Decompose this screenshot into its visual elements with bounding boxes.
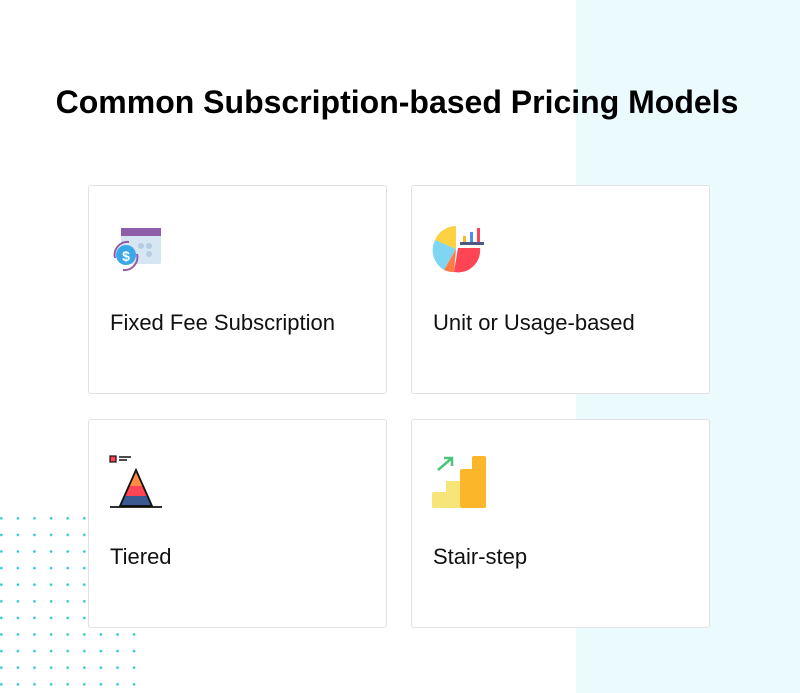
card: unit or usage bbox=[411, 185, 710, 394]
card: stair-step bbox=[411, 419, 710, 628]
icon: pyramid bbox=[109, 455, 162, 508]
icon: stairs bbox=[432, 456, 486, 508]
label: Stair-step bbox=[433, 544, 527, 569]
label: Tiered bbox=[110, 544, 172, 569]
label: Unit or Usage-based bbox=[433, 310, 635, 335]
card: fixed fee bbox=[88, 185, 387, 394]
icon: calendar coin: $ bbox=[122, 248, 130, 264]
label: Fixed Fee Subscription bbox=[110, 310, 335, 335]
card: tiered bbox=[88, 419, 387, 628]
icon: calendar coin bbox=[114, 228, 161, 272]
dot pattern bbox=[0, 516, 136, 686]
title: Common Subscription-based Pricing Models bbox=[56, 84, 738, 120]
icon: pie chart bbox=[432, 226, 484, 272]
